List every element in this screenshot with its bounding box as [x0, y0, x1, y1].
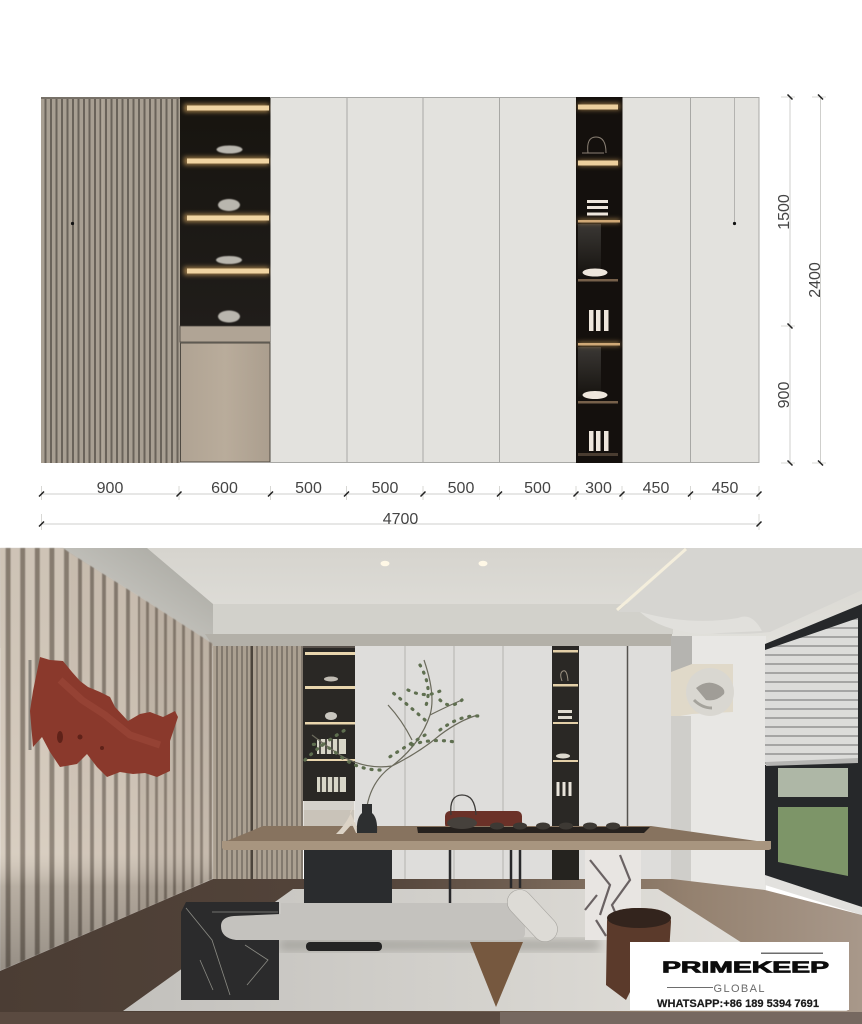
watermark logo box: WHATSAPP:+86 189 5394 7691 — [657, 998, 819, 1010]
watermark logo box: GLOBAL — [714, 983, 764, 995]
dimension lines — [39, 94, 826, 530]
wooden tea table — [222, 826, 771, 850]
watermark logo box — [630, 942, 849, 1010]
dimension labels: 300 — [585, 480, 612, 497]
left display cabinet with lit shelves — [180, 97, 270, 462]
dimension labels: 450 — [643, 480, 669, 497]
dimension labels: 900 — [776, 382, 793, 408]
red carved wood wall art — [30, 657, 178, 777]
upholstered bench — [221, 903, 525, 940]
dimension labels — [97, 194, 824, 528]
watermark logo box: PRIMEKEEP — [662, 960, 830, 976]
marble table leg — [585, 850, 641, 940]
ceiling — [0, 548, 862, 648]
dimension labels: 500 — [295, 480, 322, 497]
dimension labels: 600 — [211, 480, 238, 497]
dimension labels: 900 — [97, 480, 123, 497]
left wall vertical fins — [0, 548, 213, 971]
dimension labels: 2400 — [807, 262, 824, 298]
shelf niche in photo, right — [552, 646, 579, 880]
black marble cube — [181, 902, 279, 1000]
floor — [0, 879, 862, 1024]
dark bench base shadow — [306, 942, 382, 951]
bronze face stool — [606, 908, 671, 1000]
dimension labels: 500 — [524, 480, 551, 497]
window with blinds and greenery — [765, 604, 862, 915]
tea chair behind table — [445, 811, 522, 903]
vases on table — [336, 804, 377, 834]
shadow under bench on rug — [279, 940, 600, 950]
dark niche base visible under table — [552, 850, 579, 880]
elevation drawing: wall cabinet front view — [41, 97, 759, 463]
shelf niche in photo, left — [303, 646, 355, 834]
back wall white panels — [355, 646, 672, 880]
plain white door panels — [270, 97, 759, 463]
dimension labels: 500 — [372, 480, 398, 497]
interior photo scene — [0, 548, 862, 1024]
dimension labels: 1500 — [776, 194, 793, 230]
dimension labels: 500 — [448, 480, 474, 497]
fluted wood slat panel — [41, 97, 180, 463]
dimension labels: 4700 — [383, 511, 418, 528]
dimension labels: 450 — [712, 480, 738, 497]
right wall column with moon alcove — [671, 636, 766, 890]
back wall fluted wood — [213, 646, 303, 880]
narrow display niche with lit shelves — [576, 97, 622, 463]
black table pedestal — [304, 850, 392, 905]
bolster cushion — [502, 884, 563, 947]
rug — [123, 889, 848, 1011]
tea set on table — [447, 795, 620, 830]
plant branches and leaves — [305, 660, 478, 806]
bench base wedge — [470, 942, 523, 1007]
